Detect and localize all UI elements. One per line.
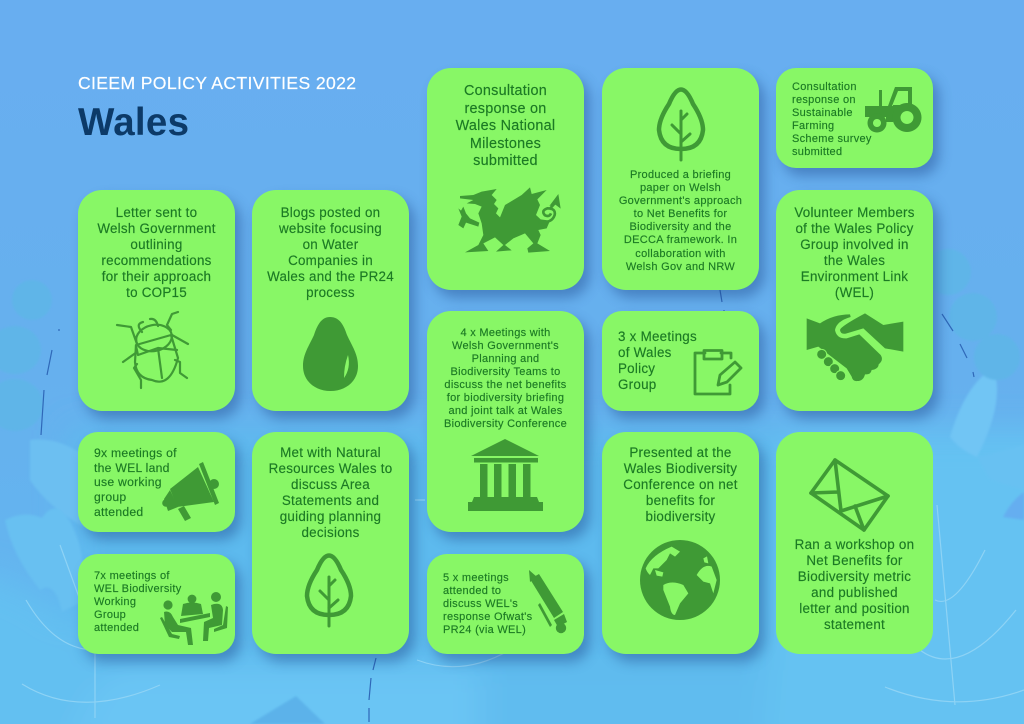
text: Wales and the PR24 xyxy=(267,269,394,284)
text: Biodiversity Conference xyxy=(444,418,567,430)
text xyxy=(619,169,742,273)
text: attended xyxy=(94,622,139,634)
text: website focusing xyxy=(279,221,382,236)
text xyxy=(623,445,738,524)
text: Group involved in xyxy=(800,237,909,252)
panel: volunteer members xyxy=(776,190,933,411)
text: and published xyxy=(811,585,898,600)
text: Working xyxy=(94,596,136,608)
text: Statements and xyxy=(282,493,379,508)
text: Wales Biodiversity xyxy=(624,461,737,476)
icon: megaphone xyxy=(162,462,219,521)
text: to COP15 xyxy=(126,285,187,300)
text: Environment Link xyxy=(801,269,908,284)
text: 3 x Meetings xyxy=(618,329,697,344)
text: submitted xyxy=(473,153,538,169)
text: WEL Biodiversity xyxy=(94,583,182,595)
text: paper on Welsh xyxy=(640,182,721,194)
text: attended xyxy=(94,505,143,519)
icon: beetle xyxy=(116,310,190,390)
text xyxy=(94,446,177,519)
icon: clipboard and pencil xyxy=(694,349,742,396)
text: response on xyxy=(465,101,546,117)
text xyxy=(792,81,872,158)
text xyxy=(267,205,394,300)
text xyxy=(794,205,915,300)
text: the WEL land xyxy=(94,461,170,475)
panel: farming consultation xyxy=(776,68,933,168)
text: guiding planning xyxy=(280,509,381,524)
text: outlining xyxy=(130,237,183,252)
text: Welsh Government xyxy=(97,221,216,236)
text: on Water xyxy=(303,237,358,252)
text: submitted xyxy=(792,146,842,158)
icon: water drop xyxy=(303,317,358,391)
heading: Wales: Wales xyxy=(78,101,189,144)
text: group xyxy=(94,490,126,504)
text: Resources Wales to xyxy=(269,461,392,476)
text: 4 x Meetings with xyxy=(460,326,551,338)
panel: letter to Welsh Government xyxy=(78,190,235,411)
text xyxy=(618,329,697,392)
text: Milestones xyxy=(470,136,541,152)
text: discuss Area xyxy=(291,477,370,492)
text: process xyxy=(306,285,355,300)
icon: Welsh dragon xyxy=(458,188,561,253)
icon: globe xyxy=(640,540,720,620)
text: 7x meetings of xyxy=(94,570,170,582)
icon: envelope xyxy=(809,458,890,532)
text: recommendations xyxy=(101,253,212,268)
text: for biodiversity briefing xyxy=(447,392,564,404)
text: Welsh Gov and NRW xyxy=(626,261,735,273)
text: response Ofwat's xyxy=(443,611,532,623)
text: Scheme survey xyxy=(792,133,872,145)
panel: workshop xyxy=(776,432,933,654)
panel: Wales Biodiversity Conference xyxy=(602,432,759,654)
text: of the Wales Policy xyxy=(795,221,914,236)
text: letter and position xyxy=(799,601,910,616)
text: Biodiversity Teams to xyxy=(450,366,561,378)
text: decisions xyxy=(301,525,360,540)
text: Biodiversity and the xyxy=(630,221,732,233)
text: Conference on net xyxy=(623,477,738,492)
text: response on xyxy=(792,94,856,106)
icon: government building xyxy=(468,439,543,511)
text: attended to xyxy=(443,585,501,597)
panel: WEL land use meetings xyxy=(78,432,235,532)
text: Welsh Government's xyxy=(452,340,559,352)
panel: Natural Resources Wales xyxy=(252,432,409,654)
text: Biodiversity metric xyxy=(798,569,911,584)
text: Wales National xyxy=(456,118,555,134)
text: Policy xyxy=(618,361,655,376)
text: 5 x meetings xyxy=(443,572,509,584)
text: Letter sent to xyxy=(116,205,197,220)
text: Consultation xyxy=(464,83,547,99)
text: Volunteer Members xyxy=(794,205,915,220)
text: Farming xyxy=(792,120,834,132)
text: 9x meetings of xyxy=(94,446,177,460)
icon: meeting xyxy=(160,592,228,645)
text xyxy=(444,326,567,430)
text: use working xyxy=(94,475,162,489)
text: discuss the net benefits xyxy=(444,379,567,391)
text xyxy=(456,83,555,169)
text: statement xyxy=(824,617,885,632)
text: the Wales xyxy=(824,253,885,268)
text: discuss WEL's xyxy=(443,598,518,610)
text: and joint talk at Wales xyxy=(448,405,563,417)
text: collaboration with xyxy=(635,248,726,260)
text xyxy=(443,572,532,636)
text: Met with Natural xyxy=(280,445,381,460)
text: Presented at the xyxy=(629,445,732,460)
icon: tractor xyxy=(865,87,922,132)
icon: pen xyxy=(529,570,567,634)
icon: handshake xyxy=(806,314,904,382)
text: Planning and xyxy=(472,353,539,365)
text: Consultation xyxy=(792,81,857,93)
text: (WEL) xyxy=(835,285,874,300)
text: Net Benefits for xyxy=(806,553,903,568)
panel: Wales Policy Group meetings xyxy=(602,311,759,411)
panel: Welsh Government meetings xyxy=(427,311,584,532)
icon: leaf xyxy=(304,553,354,628)
text: Produced a briefing xyxy=(630,169,731,181)
subtitle: CIEEM POLICY ACTIVITIES 2022 xyxy=(78,73,356,93)
text xyxy=(94,570,182,634)
panel: WEL biodiversity meetings xyxy=(78,554,235,654)
panel: National Milestones consultation xyxy=(427,68,584,290)
text: Group xyxy=(618,377,656,392)
text xyxy=(795,537,914,632)
panel: briefing paper xyxy=(602,68,759,290)
text: benefits for xyxy=(646,493,715,508)
text: Blogs posted on xyxy=(281,205,380,220)
text xyxy=(269,445,392,540)
text: for their approach xyxy=(102,269,211,284)
text: to Net Benefits for xyxy=(634,208,727,220)
icon: leaf xyxy=(656,87,706,162)
text: DECCA framework. In xyxy=(624,234,737,246)
text: Companies in xyxy=(288,253,373,268)
text: PR24 (via WEL) xyxy=(443,624,526,636)
text: biodiversity xyxy=(646,509,715,524)
text: Sustainable xyxy=(792,107,853,119)
text: of Wales xyxy=(618,345,672,360)
text: Government's approach xyxy=(619,195,742,207)
panel: PR24 meetings xyxy=(427,554,584,654)
panel: blogs xyxy=(252,190,409,411)
text: Group xyxy=(94,609,126,621)
text xyxy=(97,205,216,300)
title xyxy=(78,73,356,144)
text: Ran a workshop on xyxy=(795,537,914,552)
